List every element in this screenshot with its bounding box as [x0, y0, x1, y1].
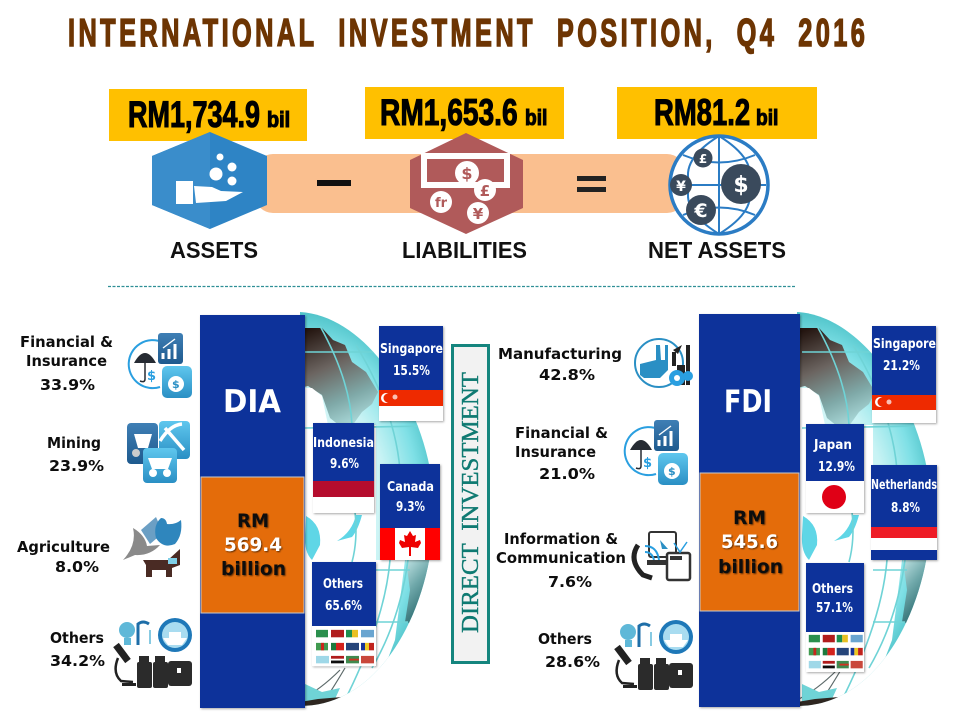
- card: DIA Indonesia: [313, 423, 374, 513]
- card: DIA Others: 65.6%: [325, 599, 362, 614]
- card: FDI Netherlands: Netherlands: [871, 478, 937, 493]
- icon: agriculture: [123, 517, 181, 577]
- text: FDI manufacturing: 42.8%: [539, 366, 595, 384]
- text: FDI information and communication: Information &: [504, 530, 618, 548]
- panel: DIA column: [200, 315, 305, 708]
- globe: FDI: [797, 310, 933, 710]
- icon: liabilities hexagon: [410, 133, 523, 234]
- icon: FDI others: [612, 620, 693, 690]
- text: DIA financial and insurance: Insurance: [26, 352, 107, 370]
- globe: DIA: [300, 310, 436, 710]
- card: DIA Indonesia: Indonesia: [313, 436, 374, 451]
- icon: net assets globe: ¥: [676, 179, 686, 195]
- text: FDI others: [538, 630, 600, 671]
- heading: DIA: DIA: [223, 384, 281, 420]
- icon: liabilities hexagon: £: [480, 182, 490, 200]
- panel: direct investment banner: [452, 346, 488, 662]
- callout: liabilities value: RM1,653.6: [380, 91, 518, 133]
- text: DIA mining: Mining: [47, 434, 101, 452]
- card: DIA Singapore: Singapore: [380, 342, 443, 357]
- callout: liabilities value: bil: [525, 106, 547, 131]
- icon: information and communication: [634, 532, 690, 580]
- label: assets: ASSETS: [170, 237, 258, 263]
- card: DIA Canada: Canada: [387, 480, 434, 495]
- equals sign: [577, 176, 606, 192]
- icon: DIA others: [111, 618, 192, 688]
- icon: net assets globe: [670, 136, 768, 234]
- text: FDI information and communication: Communication: [496, 549, 626, 567]
- card: FDI Others: 57.1%: [816, 601, 853, 616]
- icon: liabilities hexagon: fr: [435, 196, 448, 211]
- icon: net assets globe: $: [733, 173, 749, 198]
- card: DIA Others: Others: [323, 577, 363, 592]
- icon: liabilities hexagon: ¥: [473, 205, 484, 223]
- panel: direct investment banner: DIRECT INVESTMENT: [458, 372, 484, 633]
- text: DIA mining: [47, 434, 104, 475]
- panel: equation band: [255, 154, 685, 213]
- card: DIA Indonesia: 9.6%: [330, 457, 359, 472]
- card: DIA Canada: [380, 464, 440, 560]
- callout: net assets value: bil: [756, 106, 778, 131]
- card: FDI Japan: Japan: [813, 438, 852, 453]
- text: DIA financial and insurance: [20, 333, 113, 394]
- callout: net assets value: [617, 87, 817, 139]
- text: DIA financial and insurance: 33.9%: [40, 376, 95, 394]
- card: DIA Canada: 9.3%: [396, 500, 425, 515]
- minus sign: [317, 180, 351, 186]
- panel: FDI total: 545.6: [721, 531, 778, 553]
- icon: manufacturing: [635, 339, 693, 387]
- card: FDI Singapore: [872, 326, 936, 423]
- callout: assets value: bil: [267, 108, 290, 133]
- panel: DIA total: billion: [221, 558, 286, 580]
- panel: DIA total: [201, 477, 304, 613]
- callout: assets value: [109, 89, 307, 141]
- card: FDI Singapore: 21.2%: [883, 359, 920, 374]
- icon: mining: [127, 421, 190, 483]
- text: DIA mining: 23.9%: [49, 457, 104, 475]
- icon: assets hexagon: [152, 132, 267, 229]
- panel: FDI total: [700, 473, 799, 611]
- text: FDI financial and insurance: [515, 424, 608, 483]
- card: FDI Netherlands: 8.8%: [891, 501, 920, 516]
- panel: DIA total: RM: [237, 510, 269, 532]
- icon: liabilities hexagon: $: [461, 164, 473, 183]
- heading: FDI: FDI: [724, 384, 772, 420]
- text: FDI financial and insurance: Financial &: [515, 424, 608, 442]
- text: DIA others: 34.2%: [50, 652, 105, 670]
- text: DIA financial and insurance: Financial &: [20, 333, 113, 351]
- card: FDI Netherlands: [871, 465, 937, 560]
- text: DIA agriculture: 8.0%: [55, 558, 99, 576]
- panel: DIA total: 569.4: [224, 534, 282, 556]
- callout: liabilities value: [365, 87, 564, 139]
- label: net assets: NET ASSETS: [648, 237, 786, 263]
- icon: net assets globe: £: [699, 152, 707, 166]
- panel: FDI total: billion: [718, 556, 783, 578]
- icon: net assets globe: €: [693, 200, 708, 222]
- text: FDI others: Others: [538, 630, 592, 648]
- text: FDI manufacturing: Manufacturing: [498, 345, 622, 363]
- text: DIA others: Others: [50, 629, 104, 647]
- icon: FDI finance: [625, 420, 688, 485]
- text: DIA agriculture: Agriculture: [17, 538, 110, 556]
- card: FDI Japan: 12.9%: [818, 460, 855, 475]
- text: FDI financial and insurance: Insurance: [515, 443, 596, 461]
- card: FDI Japan: [806, 424, 864, 513]
- text: FDI manufacturing: [498, 345, 622, 384]
- panel: FDI column: [699, 314, 800, 707]
- callout: assets value: RM1,734.9: [128, 93, 260, 135]
- card: DIA Singapore: 15.5%: [393, 364, 430, 379]
- card: FDI Singapore: Singapore: [873, 337, 936, 352]
- text: DIA others: [50, 629, 105, 670]
- panel: FDI total: RM: [733, 507, 766, 529]
- icon: DIA finance: [129, 333, 192, 398]
- card: FDI Others: Others: [812, 582, 853, 597]
- card: FDI Others: [806, 563, 864, 672]
- title: INTERNATIONAL INVESTMENT POSITION, Q4 2016: [68, 10, 865, 54]
- text: FDI information and communication: 7.6%: [548, 573, 592, 591]
- text: DIA agriculture: [17, 538, 110, 576]
- card: DIA Others: [312, 562, 376, 666]
- text: FDI information and communication: [496, 530, 626, 591]
- label: liabilities: LIABILITIES: [402, 237, 527, 263]
- callout: net assets value: RM81.2: [654, 91, 750, 133]
- text: FDI others: 28.6%: [545, 653, 600, 671]
- text: FDI financial and insurance: 21.0%: [539, 465, 595, 483]
- card: DIA Singapore: [379, 326, 443, 421]
